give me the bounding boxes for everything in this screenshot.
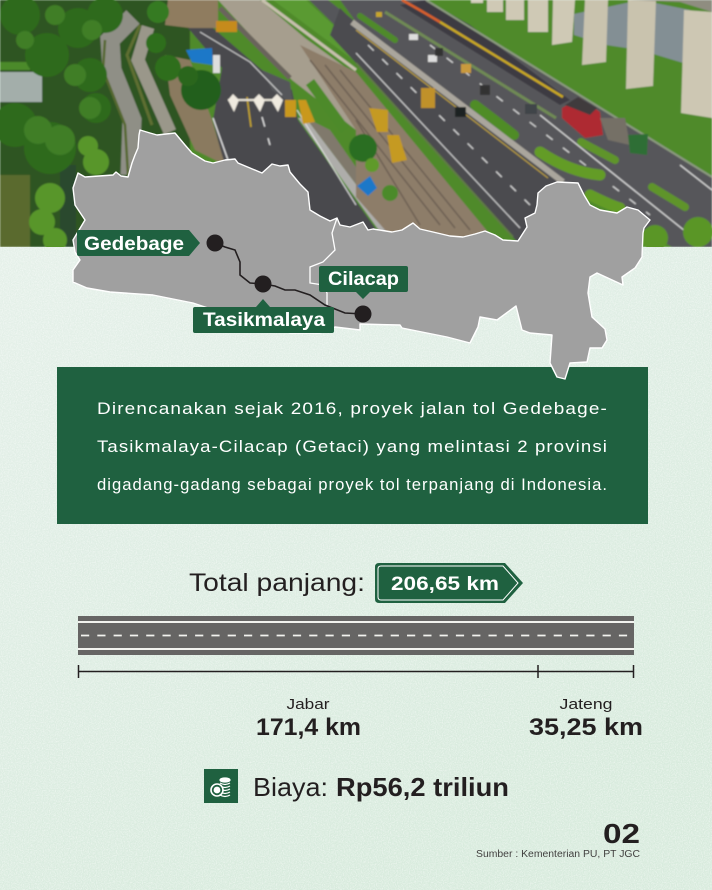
- icon: coins: [204, 769, 238, 803]
- route line: [215, 243, 363, 314]
- greenhouse: [574, 0, 690, 65]
- road markings: [356, 53, 520, 228]
- stat: Jabar: [256, 696, 361, 741]
- road illustration: [78, 616, 634, 655]
- vehicles: [409, 34, 418, 40]
- road sign: total length: [375, 563, 523, 603]
- source: Sumber : Kementerian PU, PT JGC: [476, 849, 640, 860]
- distance bracket: [78, 665, 634, 678]
- green description panel: [57, 367, 648, 524]
- road C dark patch: [400, 0, 570, 105]
- trees: [0, 0, 123, 174]
- description text: digadang-gadang sebagai proyek tol terpanjang di Indonesia.: [97, 476, 608, 494]
- paths on the left: [110, 17, 133, 175]
- stat: Jabar: Jabar: [286, 696, 330, 713]
- pillars: [471, 0, 483, 3]
- yellow edge stripe: [402, 0, 440, 22]
- label: Tasikmalaya: [193, 299, 334, 333]
- aerial photo of toll road: [0, 0, 712, 252]
- overpass: [218, 0, 356, 130]
- red truck: [562, 98, 603, 138]
- hedges: [360, 16, 395, 40]
- cost line: Biaya:: [253, 772, 328, 802]
- label: Cilacap: Cilacap: [328, 269, 399, 290]
- description text: Direncanakan sejak 2016, proyek jalan tol Gedebage-: [97, 400, 608, 418]
- yellow machines right: [369, 108, 388, 132]
- stat: Jateng: Jateng: [560, 696, 612, 713]
- stat: Jateng: [529, 696, 643, 741]
- province border: [310, 218, 337, 306]
- left main road: [188, 28, 378, 240]
- blue tarp: [186, 48, 213, 65]
- description text: [97, 400, 608, 494]
- road sign: total length: 206,65 km: [391, 574, 499, 595]
- gantry: [228, 99, 282, 101]
- description text: Tasikmalaya-Cilacap (Getaci) yang melintasi 2 provinsi: [97, 438, 608, 456]
- yellow machines left: [216, 21, 237, 32]
- shrubs on embankment: [310, 82, 345, 130]
- label: Gedebage: [77, 230, 200, 256]
- green strip: [274, 0, 349, 56]
- dirt at top: [165, 0, 218, 28]
- concrete divider: [352, 22, 563, 182]
- stat: Jateng: 35,25 km: [529, 714, 643, 741]
- road A upper piece and tan band: [300, 45, 492, 247]
- cost line: Rp56,2 triliun: [336, 772, 509, 802]
- province: Jawa Barat and Jawa Tengah: [73, 130, 650, 379]
- road B and C: [340, 0, 712, 247]
- page number: 02: [603, 818, 640, 849]
- cost line: [253, 772, 509, 802]
- road A: [330, 8, 563, 245]
- label: Cilacap: [319, 266, 408, 299]
- stat: Jabar: 171,4 km: [256, 714, 361, 741]
- total length heading: Total panjang:: [189, 569, 365, 597]
- pond: [0, 72, 42, 102]
- map of West and Central Java: [73, 130, 650, 379]
- city dots: [206, 234, 372, 322]
- guardrail: [426, 0, 712, 177]
- label: Tasikmalaya: Tasikmalaya: [203, 310, 325, 331]
- label: Gedebage: Gedebage: [84, 234, 184, 255]
